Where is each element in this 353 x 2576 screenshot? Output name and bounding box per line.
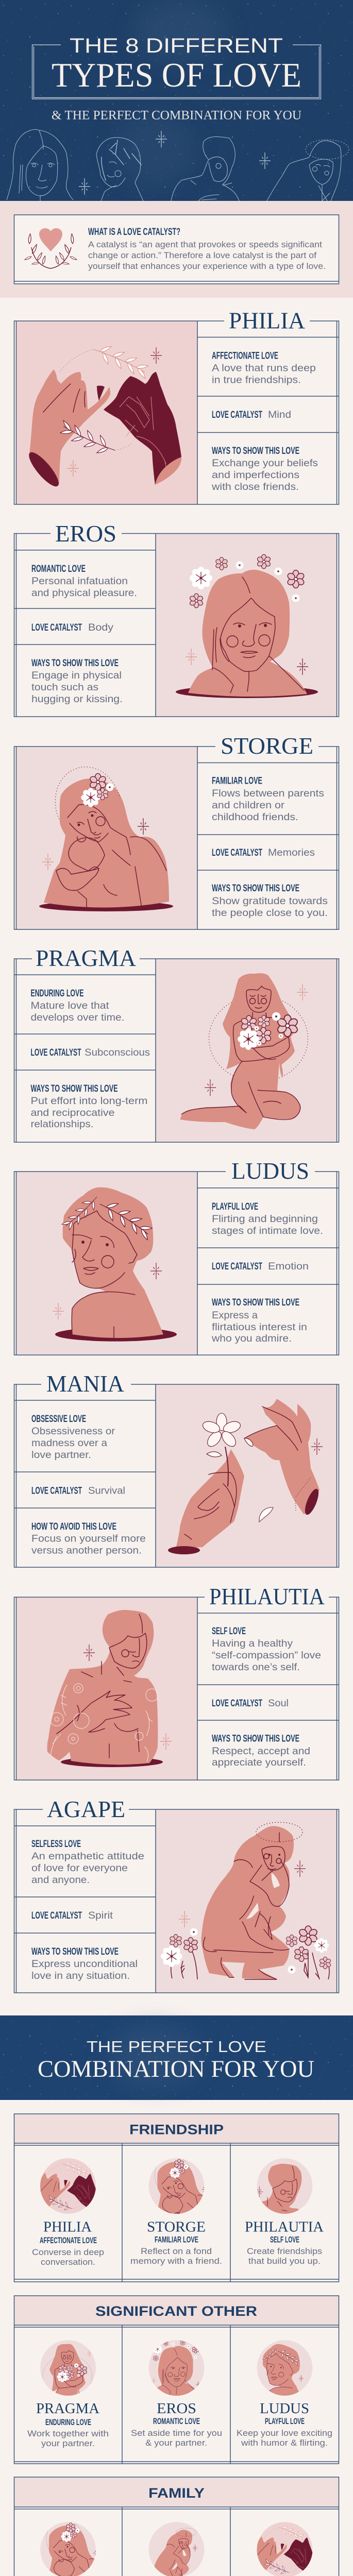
frame bbox=[14, 2296, 339, 2464]
definition: PLAYFUL LOVE bbox=[212, 1201, 258, 1212]
definition: “self-compassion” love bbox=[212, 1650, 321, 1661]
advice: memory with a friend. bbox=[130, 2257, 222, 2266]
ways to show: and reciprocative bbox=[31, 1108, 114, 1118]
ways to show: Exchange your beliefs bbox=[212, 458, 318, 469]
definition: towards one’s self. bbox=[212, 1662, 300, 1673]
ways to show bbox=[212, 1733, 310, 1768]
illustration: pinky promise hands bbox=[25, 340, 181, 490]
catalyst: Mind bbox=[268, 410, 291, 420]
ways to show: Engage in physical bbox=[31, 670, 122, 681]
definition: develops over time. bbox=[31, 1012, 125, 1023]
catalyst: LOVE CATALYST bbox=[31, 1047, 81, 1058]
illustration panel: pragma bbox=[156, 959, 337, 1142]
panel: love catalyst bbox=[14, 215, 339, 284]
ways to show: appreciate yourself. bbox=[212, 1757, 306, 1768]
catalyst text: A catalyst is “an agent that provokes or speeds significant bbox=[88, 240, 322, 249]
sublabel: AFFECTIONATE LOVE bbox=[40, 2236, 97, 2245]
illustration panel: eros bbox=[156, 534, 337, 717]
header banner bbox=[0, 0, 353, 201]
catalyst: Survival bbox=[88, 1486, 125, 1496]
definition: An empathetic attitude bbox=[31, 1851, 144, 1862]
line portrait: ludus bbox=[96, 138, 143, 201]
frame bbox=[14, 534, 339, 717]
illustration panel: philia bbox=[16, 321, 197, 504]
definition bbox=[31, 563, 137, 599]
catalyst: Soul bbox=[268, 1698, 289, 1709]
ways to show: WAYS TO SHOW THIS LOVE bbox=[31, 1083, 117, 1094]
sublabel: ENDURING LOVE bbox=[45, 2418, 91, 2427]
definition: and physical pleasure. bbox=[31, 588, 137, 599]
definition bbox=[31, 988, 125, 1023]
banner line 2: COMBINATION FOR YOU bbox=[38, 2056, 314, 2082]
catalyst: Emotion bbox=[268, 1261, 309, 1272]
ways to show: Respect, accept and bbox=[212, 1746, 310, 1757]
ways to show: Put effort into long-term bbox=[31, 1096, 147, 1107]
frame bbox=[14, 1597, 339, 1780]
title line 2: TYPES OF LOVE bbox=[52, 56, 301, 94]
frame bbox=[14, 321, 339, 504]
advice: Keep your love exciting bbox=[237, 2429, 332, 2438]
panel: ludus bbox=[14, 1158, 339, 1355]
heading: ludus: LUDUS bbox=[231, 1158, 309, 1184]
definition: Obsessiveness or bbox=[31, 1426, 115, 1437]
name: PRAGMA bbox=[36, 2400, 99, 2417]
card: philautia bbox=[245, 2158, 324, 2266]
icon: heart with wreath bbox=[24, 228, 77, 268]
catalyst: Body bbox=[88, 622, 114, 633]
definition bbox=[212, 350, 316, 385]
definition: SELFLESS LOVE bbox=[31, 1838, 81, 1850]
ways to show: the people close to you. bbox=[212, 908, 328, 919]
definition: madness over a bbox=[31, 1438, 107, 1449]
illustration: mother and baby bbox=[39, 767, 173, 911]
banner line 1: THE PERFECT LOVE bbox=[87, 2038, 266, 2056]
catalyst: LOVE CATALYST bbox=[31, 1910, 82, 1921]
frame bbox=[14, 2477, 339, 2576]
name: EROS bbox=[157, 2400, 196, 2417]
card: storge bbox=[40, 2522, 96, 2576]
catalyst text bbox=[88, 240, 326, 271]
name: LUDUS bbox=[260, 2400, 309, 2417]
panel: storge bbox=[14, 733, 339, 929]
advice: conversation. bbox=[41, 2258, 95, 2267]
name: STORGE bbox=[147, 2219, 206, 2235]
medallion bbox=[40, 2522, 96, 2576]
panel: mania bbox=[14, 1370, 339, 1567]
frame bbox=[14, 1172, 339, 1355]
heading: mania: MANIA bbox=[46, 1370, 124, 1397]
medallion bbox=[40, 2158, 96, 2214]
header sparkles bbox=[79, 131, 271, 195]
ways to show: Express a bbox=[212, 1310, 258, 1321]
ways to show: WAYS TO SHOW THIS LOVE bbox=[212, 1733, 299, 1744]
medallion bbox=[40, 2340, 96, 2396]
catalyst: LOVE CATALYST bbox=[31, 622, 82, 633]
heading: philia: PHILIA bbox=[229, 307, 305, 334]
sublabel: SELF LOVE bbox=[270, 2235, 299, 2245]
ways to show: who you admire. bbox=[211, 1333, 292, 1344]
definition: Mature love that bbox=[31, 1001, 109, 1011]
medallion bbox=[257, 2340, 312, 2396]
definition: Flirting and beginning bbox=[212, 1214, 318, 1225]
ways to show bbox=[31, 657, 123, 705]
pink intro band bbox=[0, 201, 353, 298]
catalyst: LOVE CATALYST bbox=[212, 1698, 262, 1709]
definition: of love for everyone bbox=[31, 1863, 128, 1874]
ways to show: Express unconditional bbox=[31, 1959, 138, 1970]
definition: ENDURING LOVE bbox=[31, 988, 83, 999]
definition: A love that runs deep bbox=[212, 363, 316, 374]
heading: friendship: FRIENDSHIP bbox=[129, 2122, 224, 2138]
ways to show: love in any situation. bbox=[31, 1971, 130, 1981]
definition bbox=[212, 775, 324, 823]
heading: philautia: PHILAUTIA bbox=[209, 1583, 325, 1609]
ways to show bbox=[31, 1083, 147, 1130]
card: eros bbox=[131, 2340, 222, 2448]
advice: Reflect on a fond bbox=[141, 2247, 212, 2256]
frame bbox=[14, 1384, 339, 1567]
catalyst bbox=[31, 1047, 150, 1058]
medallion bbox=[257, 2522, 312, 2576]
header band bbox=[14, 2114, 339, 2143]
catalyst heading: WHAT IS A LOVE CATALYST? bbox=[88, 226, 180, 238]
advice: that build you up. bbox=[248, 2257, 321, 2266]
frame bbox=[14, 2114, 339, 2282]
heading: family: FAMILY bbox=[148, 2485, 205, 2501]
ways to show: WAYS TO SHOW THIS LOVE bbox=[212, 445, 299, 456]
how to avoid bbox=[31, 1521, 146, 1556]
card: philia bbox=[32, 2158, 104, 2267]
advice: with humor & flirting. bbox=[241, 2438, 328, 2448]
sublabel: PLAYFUL LOVE bbox=[265, 2417, 305, 2426]
card: ludus bbox=[237, 2340, 332, 2448]
title frame bbox=[32, 45, 321, 99]
panel: agape bbox=[14, 1796, 339, 1993]
how to avoid: Focus on yourself more bbox=[31, 1533, 146, 1545]
medallion bbox=[148, 2522, 204, 2576]
header band bbox=[14, 2296, 339, 2325]
definition bbox=[212, 1201, 323, 1236]
how to avoid: HOW TO AVOID THIS LOVE bbox=[31, 1521, 116, 1532]
illustration panel: philautia bbox=[16, 1597, 197, 1780]
ways to show: hugging or kissing. bbox=[31, 694, 123, 705]
line portrait: philautia bbox=[171, 137, 239, 201]
heading: agape: AGAPE bbox=[47, 1796, 125, 1822]
definition bbox=[31, 1838, 144, 1886]
advice bbox=[131, 2429, 222, 2448]
definition: and children or bbox=[212, 800, 285, 811]
advice: Converse in deep bbox=[32, 2248, 104, 2257]
advice bbox=[32, 2248, 104, 2267]
catalyst: LOVE CATALYST bbox=[212, 409, 262, 420]
line portrait: agape bbox=[267, 140, 349, 201]
catalyst text: yourself that enhances your experience with a type of love. bbox=[88, 261, 326, 271]
advice: Create friendships bbox=[247, 2247, 322, 2256]
illustration: kneeling woman bbox=[180, 973, 308, 1129]
card: storge bbox=[130, 2155, 222, 2266]
definition: AFFECTIONATE LOVE bbox=[212, 350, 278, 362]
table: friendship bbox=[14, 2114, 339, 2282]
ways to show: flirtatious interest in bbox=[212, 1322, 307, 1333]
ways to show: WAYS TO SHOW THIS LOVE bbox=[31, 1946, 119, 1957]
catalyst: LOVE CATALYST bbox=[212, 847, 262, 858]
how to avoid: versus another person. bbox=[31, 1546, 142, 1556]
medallion bbox=[148, 2158, 204, 2214]
heading: pragma: PRAGMA bbox=[36, 945, 136, 971]
advice bbox=[27, 2429, 109, 2448]
definition: Having a healthy bbox=[212, 1638, 293, 1649]
definition: in true friendships. bbox=[212, 375, 301, 385]
heading: eros: EROS bbox=[55, 520, 116, 547]
illustration panel: mania bbox=[156, 1384, 337, 1567]
name: PHILIA bbox=[43, 2219, 92, 2235]
definition bbox=[212, 1625, 321, 1673]
card: agape bbox=[148, 2522, 204, 2576]
definition: FAMILIAR LOVE bbox=[212, 775, 262, 786]
ways to show: WAYS TO SHOW THIS LOVE bbox=[212, 883, 299, 894]
subtitle: & THE PERFECT COMBINATION FOR YOU bbox=[52, 108, 301, 123]
ways to show bbox=[212, 883, 328, 919]
illustration: laurel bust bbox=[53, 1188, 177, 1342]
definition: childhood friends. bbox=[212, 812, 298, 823]
definition: Personal infatuation bbox=[31, 576, 128, 587]
frame bbox=[14, 747, 339, 929]
name: PHILAUTIA bbox=[245, 2219, 324, 2235]
ways to show: and imperfections bbox=[212, 470, 299, 481]
illustration: self embrace bbox=[47, 1610, 172, 1767]
illustration panel: ludus bbox=[16, 1172, 197, 1355]
illustration: hands plucking petals bbox=[168, 1399, 323, 1554]
advice bbox=[130, 2247, 222, 2266]
advice: Set aside time for you bbox=[131, 2429, 222, 2438]
definition: love partner. bbox=[31, 1450, 91, 1461]
catalyst: Memories bbox=[268, 848, 315, 858]
ways to show: WAYS TO SHOW THIS LOVE bbox=[31, 657, 119, 669]
ways to show bbox=[211, 445, 318, 493]
frame bbox=[14, 1809, 339, 1993]
medallion bbox=[147, 2340, 205, 2397]
illustration: crouching woman with flowers bbox=[161, 1822, 331, 1979]
definition: OBSESSIVE LOVE bbox=[31, 1413, 86, 1425]
ways to show: Show gratitude towards bbox=[212, 896, 328, 907]
frame bbox=[14, 959, 339, 1142]
definition bbox=[31, 1413, 115, 1461]
illustration panel: storge bbox=[16, 747, 197, 929]
catalyst: LOVE CATALYST bbox=[31, 1485, 82, 1496]
sublabel: FAMILIAR LOVE bbox=[155, 2235, 198, 2245]
table: significant other bbox=[14, 2296, 339, 2464]
definition: Flows between parents bbox=[212, 788, 324, 799]
ways to show bbox=[211, 1297, 307, 1344]
ways to show bbox=[31, 1946, 138, 1981]
advice bbox=[247, 2247, 322, 2266]
heading: significant other: SIGNIFICANT OTHER bbox=[95, 2303, 257, 2319]
catalyst: LOVE CATALYST bbox=[212, 1261, 262, 1272]
definition: stages of intimate love. bbox=[212, 1226, 323, 1236]
card: pragma bbox=[27, 2340, 109, 2448]
definition: and anyone. bbox=[31, 1875, 90, 1886]
definition: SELF LOVE bbox=[212, 1625, 246, 1637]
ways to show: with close friends. bbox=[211, 482, 299, 493]
panel: eros bbox=[14, 520, 339, 717]
ways to show: WAYS TO SHOW THIS LOVE bbox=[212, 1297, 299, 1308]
advice: & your partner. bbox=[145, 2438, 207, 2448]
panel: pragma bbox=[14, 945, 339, 1142]
catalyst text: change or action.” Therefore a love catalyst is the part of bbox=[88, 250, 316, 260]
advice bbox=[237, 2429, 332, 2448]
illustration: woman with flowers bbox=[176, 554, 318, 698]
catalyst: Subconscious bbox=[85, 1047, 150, 1058]
heading: storge: STORGE bbox=[221, 733, 313, 759]
advice: your partner. bbox=[41, 2439, 95, 2448]
section banner: perfect combination bbox=[0, 2015, 353, 2100]
illustration panel: agape bbox=[156, 1809, 337, 1993]
panel: philia bbox=[14, 307, 339, 504]
card: philia bbox=[257, 2522, 312, 2576]
table: family bbox=[14, 2477, 339, 2576]
ways to show: touch such as bbox=[31, 682, 98, 693]
line portrait: eros bbox=[7, 129, 73, 201]
title line 1: THE 8 DIFFERENT bbox=[70, 35, 283, 57]
panel: philautia bbox=[14, 1583, 339, 1780]
sublabel: ROMANTIC LOVE bbox=[153, 2417, 200, 2426]
header band bbox=[14, 2477, 339, 2507]
medallion bbox=[257, 2158, 312, 2214]
advice: Work together with bbox=[27, 2429, 109, 2438]
catalyst: Spirit bbox=[88, 1910, 113, 1921]
definition: ROMANTIC LOVE bbox=[31, 563, 86, 574]
ways to show: relationships. bbox=[31, 1119, 94, 1130]
